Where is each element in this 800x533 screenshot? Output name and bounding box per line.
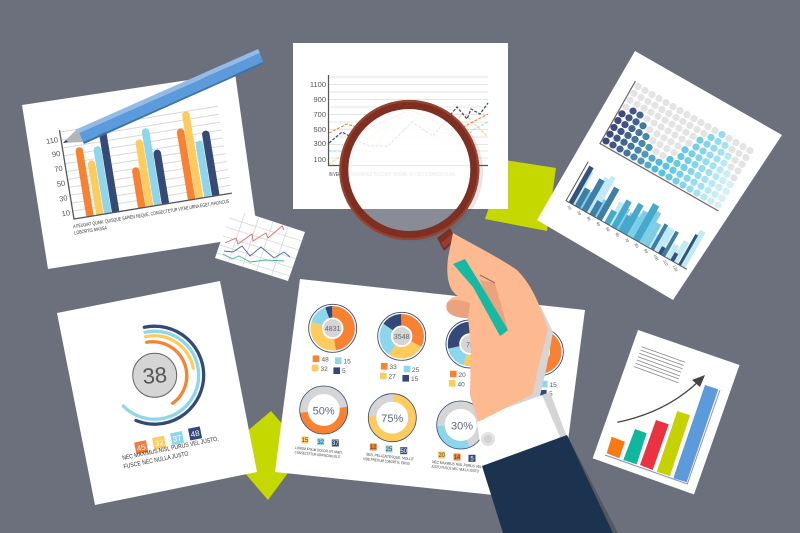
sticky note: top green — [485, 160, 556, 231]
y axis labels: 30 — [59, 193, 68, 204]
legend: partly hidden donut — [449, 371, 466, 388]
donut: partly hidden: 75 — [466, 342, 474, 349]
donut: 75%: 75% — [381, 413, 404, 425]
legend: right donut: 15 — [550, 382, 557, 389]
panel: bar chart paper — [22, 73, 258, 269]
caption: 75% — [363, 453, 415, 466]
legend: 75%: 25 — [386, 447, 393, 453]
jacket sleeve — [482, 435, 618, 533]
x axis labels: 80 — [634, 243, 639, 248]
description: FUSCE NEC NULLA JUSTO — [123, 450, 189, 470]
x axis labels: 50 — [605, 227, 610, 232]
donut: 4831: 4831 — [325, 326, 341, 333]
x axis labels: 70 — [624, 237, 629, 243]
caption: 50%: LOREM IPSUM DOLOR SIT AMET, — [295, 446, 343, 455]
y axis labels: 1100 — [310, 80, 326, 89]
legend: 4831: 15 — [344, 358, 351, 366]
x axis labels: 120 — [672, 265, 678, 272]
legend: 4831 — [312, 355, 351, 375]
legend: right donut — [540, 381, 557, 398]
legend: 30% — [438, 452, 476, 462]
donut: 3548 — [378, 312, 426, 360]
radial arcs — [123, 326, 204, 424]
x axis labels: 90 — [643, 248, 649, 254]
x axis labels: 40 — [595, 221, 601, 227]
caption: 75%: SED, PELLENTESQUE, MOLLIT — [366, 453, 415, 462]
x axis labels: 30 — [586, 216, 591, 221]
legend: 75%: 50 — [400, 449, 408, 455]
donut: partly hidden — [446, 320, 494, 368]
centre value — [133, 353, 177, 397]
description: NEC MAXIMUS NISL PURUS VEL JUSTO, — [122, 436, 219, 462]
sticky note: bottom green — [225, 411, 305, 500]
legend: 30%: 5 — [470, 456, 474, 462]
icon: magnifying glass — [340, 101, 479, 251]
description — [122, 436, 219, 470]
x axis labels: 10 — [567, 205, 572, 210]
panel: dot matrix and column paper — [537, 51, 782, 300]
legend: 75%: 12 — [370, 445, 377, 451]
bars — [605, 385, 720, 484]
line chart — [310, 75, 488, 166]
legend: 3548: 15 — [411, 376, 419, 383]
donut: 50%: 50% — [313, 406, 335, 418]
icon: hand holding the magnifier — [446, 233, 553, 422]
y axis labels: 110 — [45, 135, 59, 146]
y axis labels: 300 — [313, 139, 326, 148]
donut: 4831 — [309, 304, 357, 352]
legend: 50%: 37 — [332, 441, 339, 447]
y axis labels — [45, 135, 71, 219]
donut: right hidden — [515, 328, 563, 376]
legend: 30%: 14 — [454, 455, 461, 461]
chart caption: A FEUGIAT QUAM. QUISQUE SAPIEN NEQUE, CONSECTETUR VITAE URNA EGET, RHONCUS — [73, 199, 230, 230]
legend: 4831: 32 — [320, 366, 328, 373]
legend: 30%: 20 — [438, 453, 446, 459]
y axis labels: 100 — [313, 155, 326, 164]
text lines — [634, 347, 685, 383]
legend: 50%: 15 — [302, 438, 309, 444]
x axis labels: 100 — [653, 254, 659, 261]
chart caption: IN VEHICULA MAGNA NEC TINCIDUNT ORNARE, EX ODIO COMMODO QUAM. — [329, 172, 456, 178]
caption: 30%: NEC MAXIMUS NISL PURUS VEL — [432, 460, 482, 469]
caption: 30%: JUSTO FUSCE NEC NULLA JUSTO — [431, 465, 479, 474]
legend: 50% — [302, 436, 339, 447]
chart caption — [73, 199, 231, 237]
legend: 4831: 48 — [322, 356, 329, 364]
x axis labels: 60 — [614, 232, 620, 238]
small line chart card — [215, 208, 305, 281]
bar chart — [45, 104, 235, 239]
donut: 30% — [435, 399, 486, 451]
legend: 37 — [172, 433, 183, 444]
caption: 50%: CONSECTETUR ADIPISCING ELIT — [294, 451, 341, 459]
legend — [134, 426, 203, 454]
arrow: growth trend — [617, 375, 705, 422]
y axis labels — [310, 80, 326, 164]
legend: 3548 — [380, 363, 420, 383]
legend: partly hidden donut: 20 — [458, 372, 466, 379]
legend: 45 — [136, 442, 147, 453]
legend: 3548: 33 — [390, 364, 397, 371]
x axis labels: 110 — [662, 259, 668, 266]
panel: donut charts paper — [275, 279, 585, 502]
magnifier handle — [453, 259, 508, 336]
y axis labels: 700 — [313, 110, 326, 119]
legend: partly hidden donut: 40 — [458, 382, 465, 388]
legend: 4831: 5 — [342, 368, 346, 375]
donut: 50% — [300, 386, 348, 434]
legend: 48 — [190, 429, 201, 439]
donut: 3548: 3548 — [394, 334, 410, 341]
legend: 50%: 32 — [317, 440, 325, 446]
icon: pencil — [63, 49, 263, 144]
legend: 75% — [370, 444, 408, 455]
donut: 75% — [368, 394, 416, 442]
legend: 3548: 25 — [412, 367, 420, 374]
y axis labels: 500 — [313, 125, 326, 134]
caption: 50% — [294, 446, 343, 459]
caption: 30% — [431, 460, 482, 474]
y axis labels: 50 — [56, 179, 66, 189]
panel: radial chart paper — [57, 281, 257, 505]
legend: right donut: 5 — [549, 391, 553, 398]
donut: 30%: 30% — [451, 420, 473, 432]
centre value: 38 — [141, 362, 168, 389]
panel: line chart paper — [293, 43, 508, 209]
column chart — [562, 162, 709, 277]
legend: 32 — [154, 438, 165, 448]
y axis labels: 10 — [61, 208, 71, 218]
x axis labels — [565, 204, 680, 273]
panel: growth chart paper — [593, 330, 740, 494]
y axis labels: 900 — [313, 95, 326, 104]
y axis labels: 90 — [51, 149, 61, 159]
y axis labels: 70 — [54, 164, 63, 174]
shirt cuff — [477, 392, 567, 466]
legend: 3548: 27 — [388, 374, 396, 380]
x axis labels: 20 — [576, 210, 582, 216]
caption: 75%: VIDE PRETIUM LOBORTIS, ERISS — [363, 457, 410, 466]
chart caption: LOBORTIS MASSA — [74, 225, 108, 237]
dot matrix chart — [600, 81, 750, 211]
